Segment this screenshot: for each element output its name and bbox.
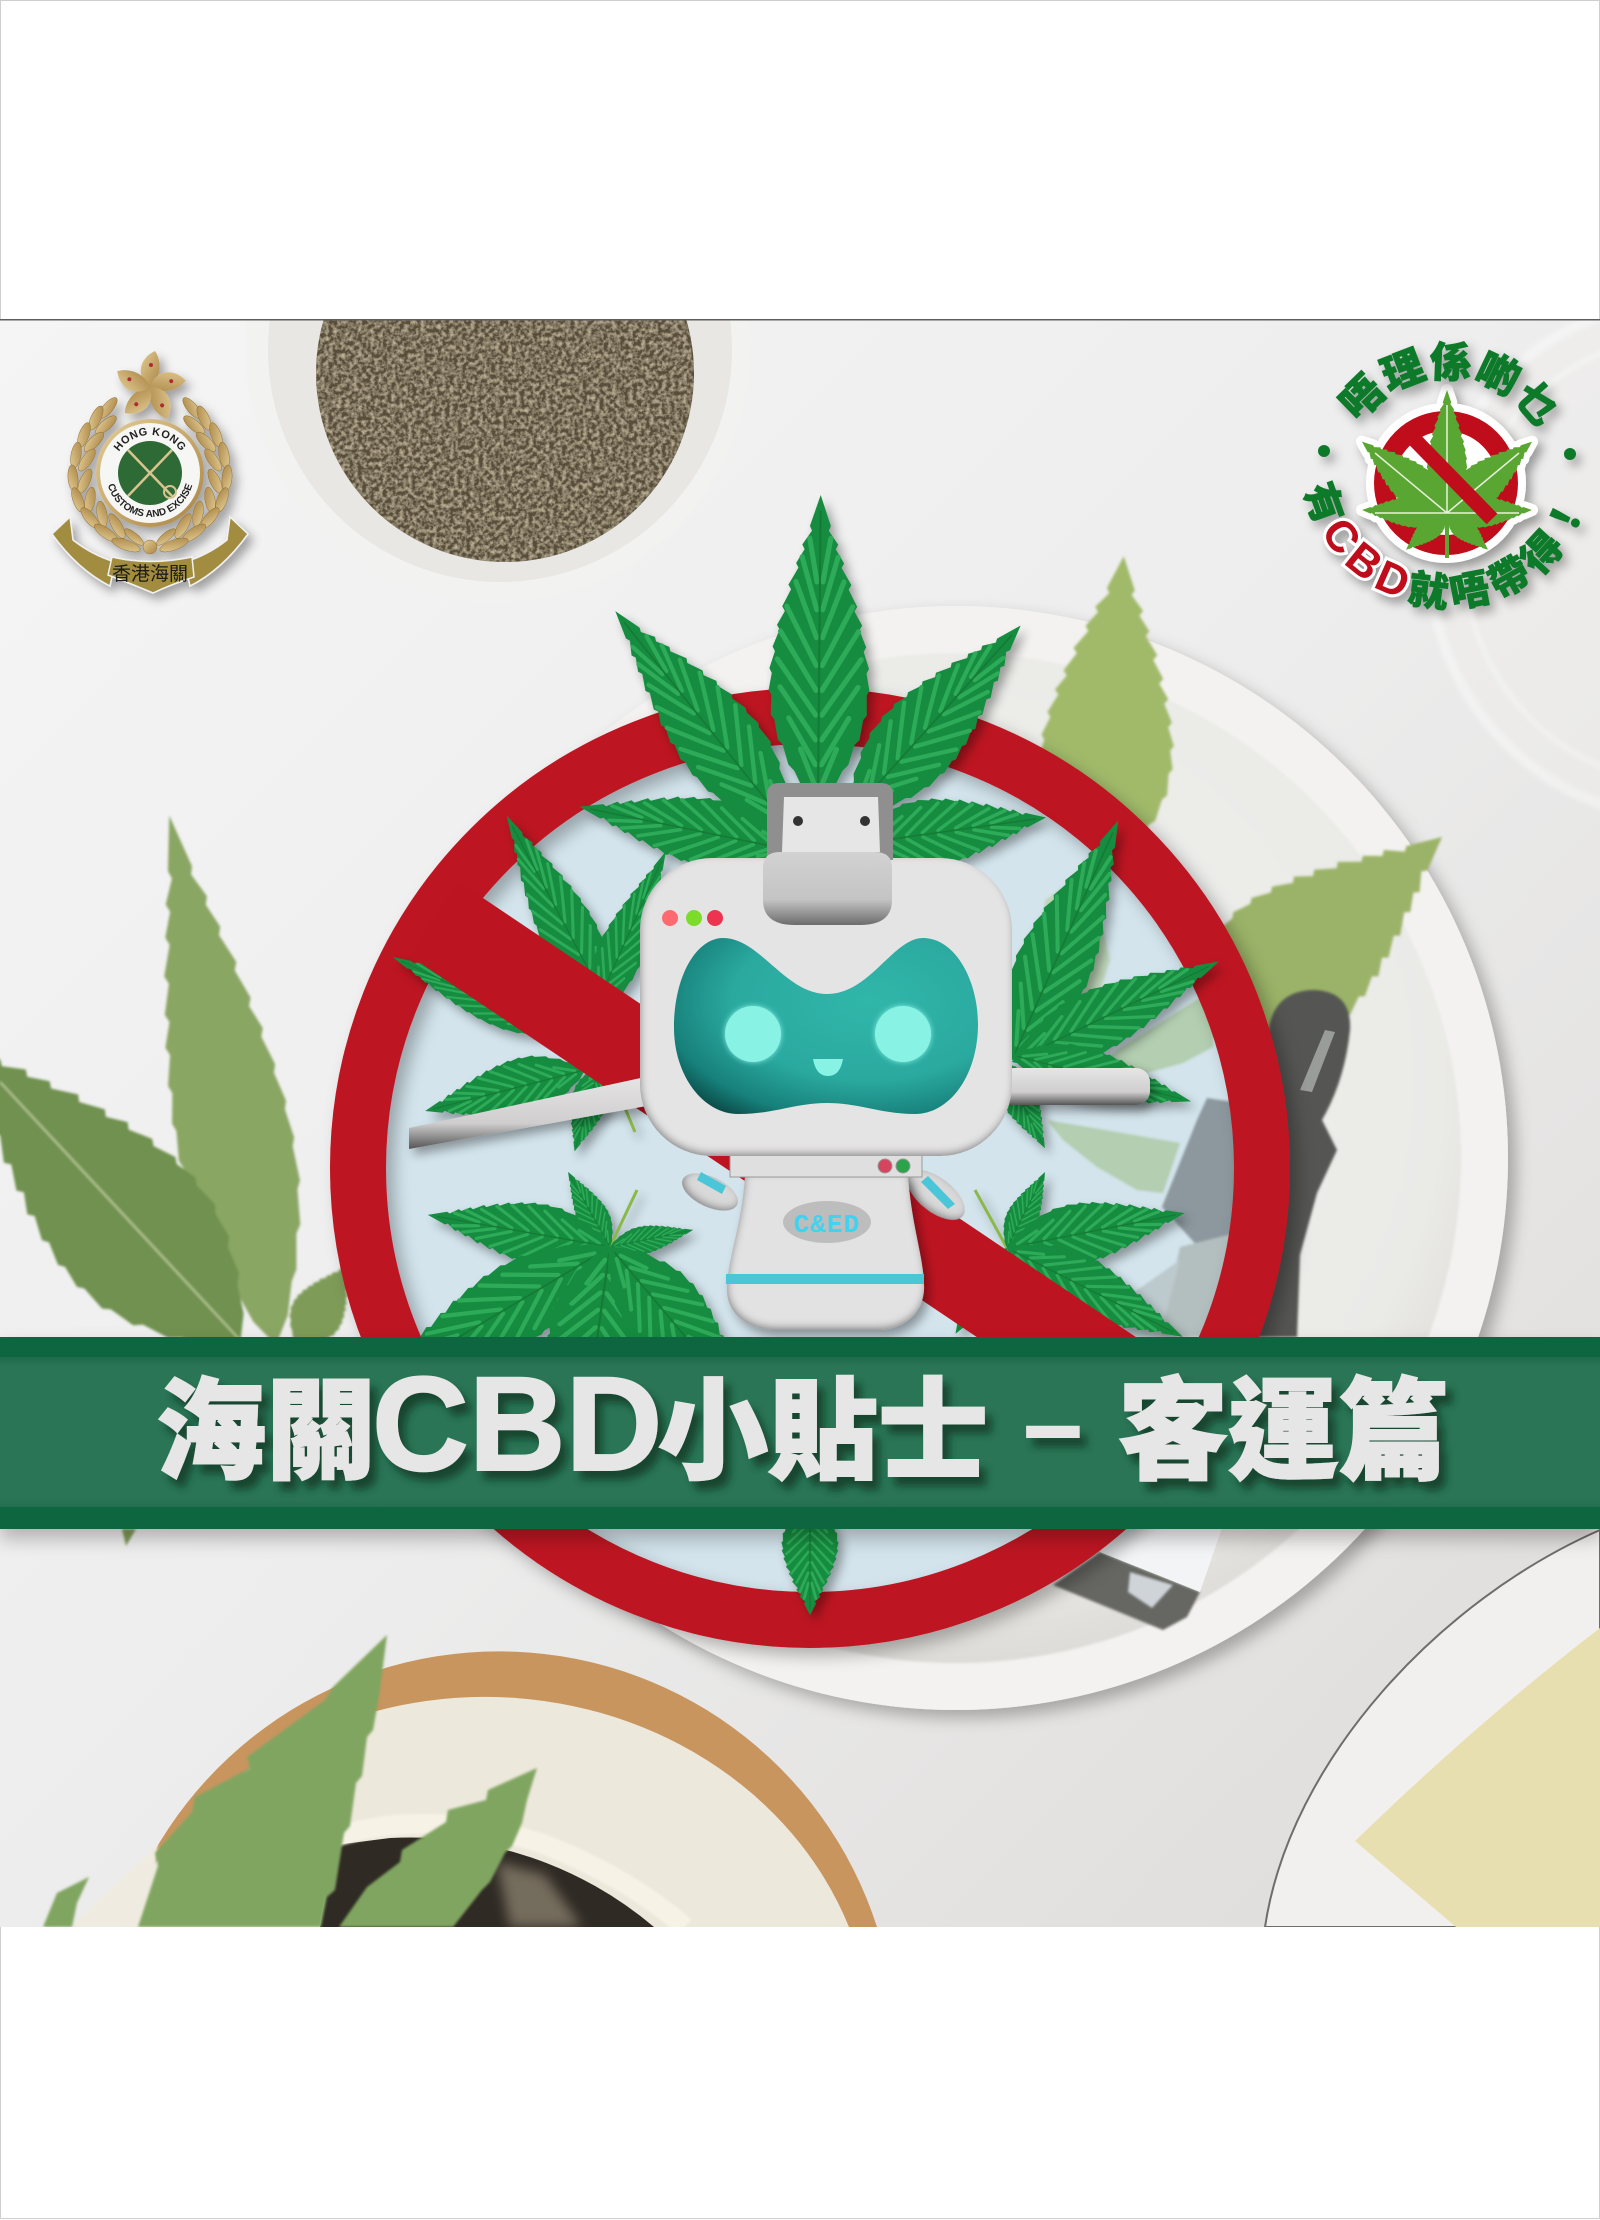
logo: no CBD campaign badge	[1302, 340, 1589, 622]
wooden bowl	[70, 1651, 877, 1927]
badge roundel: HONG KONG	[113, 427, 186, 452]
logo: Hong Kong Customs and Excise crest	[52, 351, 258, 604]
slogan text: 有CBD就唔帶得！	[1302, 480, 1589, 622]
visor face	[674, 938, 978, 1114]
prohibition sign	[358, 716, 1262, 1620]
robot mascot	[409, 783, 1150, 1330]
title text: 小貼士	[658, 1342, 988, 1502]
glass bowl at right edge	[1443, 643, 1600, 806]
title text: 海關	[156, 1342, 376, 1502]
right leaf cluster	[977, 805, 1233, 1157]
red diagonal bar	[300, 775, 1350, 1588]
status lights	[662, 910, 723, 926]
laurel wreath	[67, 395, 233, 555]
badge roundel: CUSTOMS AND EXCISE	[108, 483, 192, 517]
large white plate	[625, 606, 1524, 1726]
left leaf cluster	[384, 802, 687, 1157]
dropper bulb	[1240, 990, 1350, 1337]
title band	[0, 1337, 1600, 1529]
ribbon with Chinese name	[52, 517, 248, 593]
title text: 客運篇	[1118, 1342, 1448, 1502]
lower left leaf cluster	[349, 1108, 782, 1472]
cheese plate	[1265, 1530, 1600, 1927]
bottom photo leaves	[43, 1635, 537, 1927]
background photo panel	[0, 320, 1600, 1927]
body	[726, 1176, 924, 1330]
top leaf cluster	[573, 495, 1052, 887]
head	[640, 858, 1012, 1156]
neck with lights	[730, 1154, 922, 1177]
soil	[320, 1837, 654, 1927]
lower right leaf cluster	[940, 1165, 1196, 1364]
light blue disc	[370, 728, 1250, 1608]
bottom leaf tip	[781, 1500, 839, 1615]
badge roundel	[95, 418, 214, 539]
dropper bottle base under band	[1053, 1525, 1223, 1630]
long stick arms	[409, 1068, 1150, 1149]
slogan text: 唔理係啲乜	[1336, 340, 1565, 437]
bauhinia flower	[113, 351, 187, 422]
short arms	[676, 1161, 973, 1229]
title text: –	[1024, 1367, 1082, 1483]
sign with leaf	[1348, 390, 1546, 563]
translucent leaves and bottle inside the sign	[1043, 886, 1234, 1337]
ribbon with Chinese name: 香港海關	[112, 563, 188, 585]
photo leaf: left cluster	[0, 804, 371, 1546]
slogan text	[1302, 340, 1589, 622]
chest badge: C&ED	[794, 1210, 860, 1240]
chest badge	[783, 1201, 871, 1243]
photo leaf: behind ring at right	[1040, 556, 1443, 1031]
title text: CBD	[372, 1350, 662, 1499]
cannabis leaves over the sign	[349, 495, 1233, 1615]
USB plug on head	[763, 783, 893, 925]
red ring	[358, 716, 1262, 1620]
top edge line of the photo	[0, 319, 1600, 320]
bowl of ground powder	[268, 320, 732, 582]
